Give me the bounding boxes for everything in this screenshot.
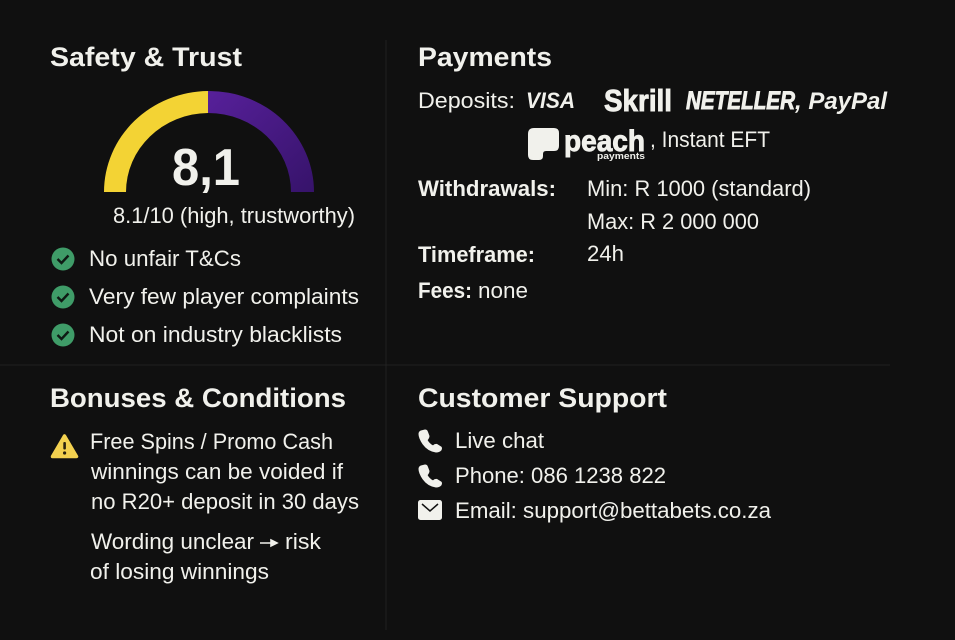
- gauge value: 8,1: [172, 139, 240, 197]
- deposit methods: Deposits:: [418, 88, 515, 113]
- check item: not blacklisted: Not on industry blacklists: [89, 322, 342, 347]
- arrow: [260, 540, 277, 546]
- logo: paypal: , PayPal: [794, 88, 888, 115]
- warning text: Free Spins / Promo Cash: [90, 429, 333, 454]
- logo: peach payments: peach: [564, 125, 645, 158]
- logo: peach payments: payments: [597, 151, 645, 161]
- fees: Fees:: [418, 278, 472, 303]
- withdrawals: Max: R 2 000 000: [587, 209, 759, 234]
- panel: customer support: [418, 383, 771, 523]
- logo: neteller: NETELLER: [686, 87, 795, 115]
- gauge chart: [104, 91, 314, 197]
- timeframe: 24h: [587, 241, 624, 266]
- withdrawals: Withdrawals:: [418, 176, 556, 201]
- check item: few complaints: Very few player complaints: [89, 284, 359, 309]
- heading: payments: Payments: [418, 42, 552, 72]
- heading: customer support: Customer Support: [418, 383, 667, 413]
- logo: visa: VISA: [526, 88, 575, 113]
- risk note: Wording unclear: [91, 529, 255, 554]
- icon: warning triangle: [52, 436, 76, 456]
- panel: bonuses and conditions: [50, 383, 359, 584]
- contact: live chat: Live chat: [455, 428, 545, 453]
- warning text: no R20+ deposit in 30 days: [91, 489, 359, 514]
- timeframe: [418, 241, 624, 267]
- warning text: [90, 429, 359, 514]
- deposit methods: , Instant EFT: [650, 127, 770, 152]
- timeframe: Timeframe:: [418, 242, 535, 267]
- warning text: winnings can be voided if: [90, 459, 344, 484]
- risk note: of losing winnings: [90, 559, 269, 584]
- icon: phone: [419, 430, 442, 452]
- withdrawals: [418, 176, 811, 234]
- contact: phone: Phone: 086 1238 822: [455, 463, 666, 488]
- gauge caption: 8.1/10 (high, trustworthy): [113, 203, 355, 228]
- panel: safety and trust: [50, 42, 359, 347]
- panel: payments: [418, 42, 888, 303]
- fees: [418, 278, 528, 303]
- deposit methods: [418, 83, 888, 161]
- icon: envelope: [418, 500, 442, 520]
- checklist: [52, 246, 359, 347]
- logo: peach payments: [528, 125, 645, 161]
- contact: email: Email: support@bettabets.co.za: [455, 498, 771, 523]
- icon: phone: [419, 465, 442, 487]
- risk note: risk: [285, 529, 322, 554]
- withdrawals: Min: R 1000 (standard): [587, 176, 811, 201]
- heading: safety and trust: Safety & Trust: [50, 42, 242, 72]
- fees: none: [478, 278, 528, 303]
- logo: skrill: Skrill: [604, 83, 672, 118]
- risk note: [90, 529, 322, 584]
- heading: bonuses and conditions: Bonuses & Conditions: [50, 383, 346, 413]
- check item: no unfair terms: No unfair T&Cs: [89, 246, 241, 271]
